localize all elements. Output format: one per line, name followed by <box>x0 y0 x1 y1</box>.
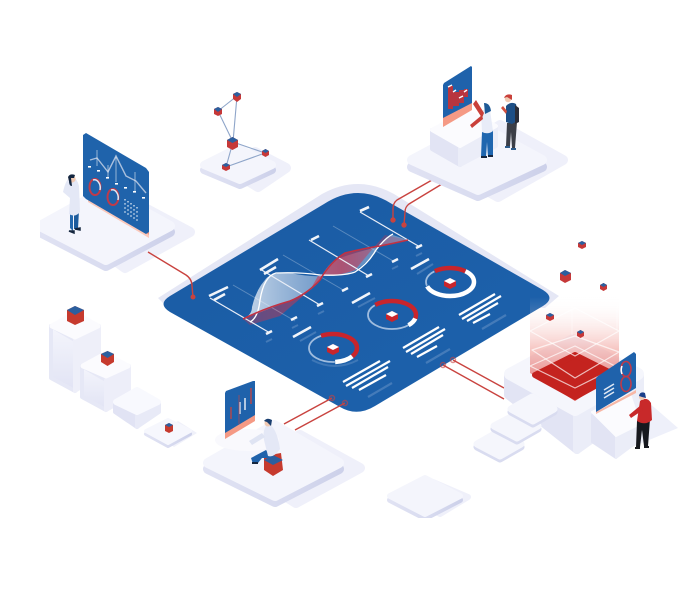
data board rim <box>158 184 559 310</box>
chart: axis tick labels <box>209 207 429 337</box>
console with screen: right <box>592 352 640 458</box>
stair block: second with cube <box>82 351 129 410</box>
donut chart: lower <box>309 334 358 366</box>
stair block: tall with cube <box>51 306 99 391</box>
text lines: middle <box>403 327 450 363</box>
platform shadows <box>80 125 563 503</box>
steps: three flat slabs <box>477 397 554 459</box>
text lines: lower <box>343 361 392 397</box>
platform: bottom analyst <box>208 425 339 502</box>
person: man with tablet <box>501 94 519 149</box>
text lines: upper <box>459 294 506 329</box>
platform: empty bottom <box>390 478 468 518</box>
connector: bottom platform to board <box>284 396 348 430</box>
chart: faint tick shadows <box>266 253 433 342</box>
block with screen: top right <box>432 66 496 165</box>
data board <box>164 193 550 412</box>
chart: area and curves <box>210 212 420 333</box>
person: woman presenting <box>470 100 493 157</box>
person: man in red sweater <box>629 392 652 448</box>
donut chart: upper <box>426 268 474 296</box>
stair block: third empty <box>115 390 159 427</box>
connector: top-right platform to board <box>391 180 442 227</box>
stair block: fourth flat with cube <box>146 420 197 447</box>
person: seated analyst with cube <box>249 419 283 476</box>
connector: right base to board <box>440 358 504 399</box>
floating data cubes <box>546 241 607 338</box>
connector: left platform to board <box>148 252 195 299</box>
data tower base <box>508 340 678 450</box>
person: scientist <box>63 174 80 233</box>
donut chart: middle <box>368 301 416 329</box>
molecule network graph <box>214 92 269 171</box>
dashboard screen: left <box>83 133 149 238</box>
glowing red data column <box>530 252 619 401</box>
platform: left scientist <box>40 190 170 266</box>
platform: molecule <box>204 148 272 185</box>
dashboard screen: bottom <box>215 381 279 451</box>
platform: top right team <box>412 125 542 196</box>
